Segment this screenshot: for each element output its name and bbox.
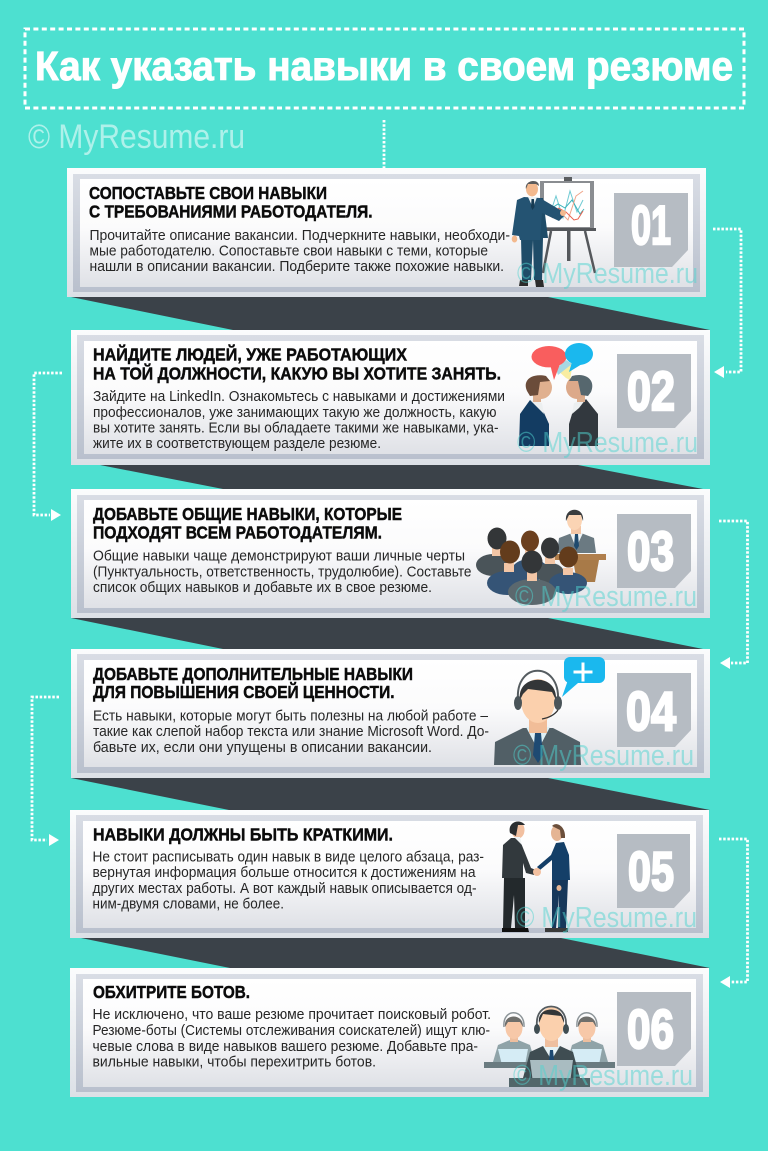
watermark: step 5: © MyResume.ru (516, 902, 697, 934)
title frame and heading (25, 29, 744, 108)
arrow: step 4 to step 5 (32, 697, 59, 846)
body text: step 6: Не исключено, что ваше резюме прочитает поисковый робот. (92, 1007, 491, 1023)
body text: step 3: (Пунктуальность, ответственность, трудолюбие). Составьте (93, 565, 472, 581)
heading: step 1: С ТРЕБОВАНИЯМИ РАБОТОДАТЕЛЯ. (89, 202, 372, 222)
body text: step 5: ним-двумя словами, не более. (92, 897, 284, 913)
panel: step 6 (70, 968, 709, 1097)
body text: step 1: Прочитайте описание вакансии. Подчеркните навыки, необходи- (90, 228, 510, 244)
body text: step 2: вы хотите занять. Если вы обладаете такими же навыками, ука- (93, 421, 499, 437)
body text: step 1: нашли в описании вакансии. Подберите также похожие навыки. (90, 259, 504, 275)
dark ribbon: 1 to 2 (71, 297, 710, 330)
number badge: 03: 03 (627, 520, 674, 582)
watermark: step 3: © MyResume.ru (515, 581, 697, 613)
icon: headset operator with plus bubble (494, 657, 605, 765)
number badge: 05: 05 (628, 840, 674, 902)
icon: presenter at easel (512, 177, 596, 287)
body text: step 6: вильные навыки, чтобы перехитрить ботов. (92, 1055, 376, 1071)
heading: step 5: НАВЫКИ ДОЛЖНЫ БЫТЬ КРАТКИМИ. (93, 825, 393, 845)
body text: step 2: Зайдите на LinkedIn. Ознакомьтесь с навыками и достижениями (93, 389, 505, 405)
number badge: 02: 02 (627, 360, 675, 422)
number badge: 01 (614, 193, 688, 267)
panel: step 3 (71, 489, 710, 618)
heading: step 3 (93, 504, 402, 543)
heading: step 6: ОБХИТРИТЕ БОТОВ. (93, 982, 250, 1002)
panel: step 4 (71, 649, 710, 778)
heading: step 4 (93, 664, 413, 702)
heading: step 2: НАЙДИТЕ ЛЮДЕЙ, УЖЕ РАБОТАЮЩИХ (93, 344, 407, 365)
watermark: step 2: © MyResume.ru (517, 427, 698, 459)
connector: title to step 1 (383, 120, 385, 168)
heading: step 4: ДОБАВЬТЕ ДОПОЛНИТЕЛЬНЫЕ НАВЫКИ (93, 664, 413, 684)
watermark: step 1: © MyResume.ru (517, 258, 698, 290)
panel: step 2 (71, 330, 710, 465)
watermark: step 6: © MyResume.ru (513, 1060, 693, 1092)
body text: step 4: бавьте их, если они упущены в описании вакансии. (93, 740, 432, 756)
number badge: 04 (617, 673, 691, 747)
number badge: 02 (617, 354, 691, 428)
body text: step 2 (93, 389, 505, 452)
body text: step 4: такие как слепой набор текста или знание Microsoft Word. До- (93, 724, 489, 740)
panel: step 1 (67, 168, 706, 297)
title frame and heading: Как указать навыки в своем резюме (35, 43, 733, 89)
arrow: step 5 to step 6 (719, 839, 748, 988)
body text: step 5: Не стоит расписывать один навык в виде целого абзаца, раз- (92, 850, 484, 866)
heading: step 4: ДЛЯ ПОВЫШЕНИЯ СВОЕЙ ЦЕННОСТИ. (93, 681, 394, 702)
body text: step 1: мые работодателю. Сопоставьте свои навыки с теми, которые (90, 244, 488, 260)
body text: step 1 (90, 228, 510, 275)
arrow: step 3 to step 4 (719, 521, 748, 669)
icon: handshake (502, 822, 570, 932)
heading: step 3: ДОБАВЬТЕ ОБЩИЕ НАВЫКИ, КОТОРЫЕ (93, 504, 402, 524)
body text: step 4 (93, 709, 489, 756)
body text: step 3: Общие навыки чаще демонстрируют ваши личные черты (93, 549, 465, 565)
body text: step 6 (92, 1007, 491, 1071)
body text: step 2: профессионалов, уже занимающих такую же должность, какую (93, 405, 497, 421)
body text: step 3: список общих навыков и добавьте их в свое резюме. (93, 580, 432, 596)
body text: step 6: чевые слова в виде навыков вашего резюме. Добавьте пра- (92, 1039, 478, 1055)
body text: step 5: вернутая информация больше относится к достижениям на (92, 865, 476, 881)
number badge: 04: 04 (626, 680, 676, 742)
body text: step 5: других местах работы. А вот каждый навык описывается од- (92, 881, 477, 897)
watermark: top: © MyResume.ru (28, 118, 245, 156)
heading: step 3: ПОДХОДЯТ ВСЕМ РАБОТОДАТЕЛЯМ. (93, 523, 382, 543)
icon: two men talking (519, 343, 598, 446)
body text: step 6: Резюме-боты (Системы отслеживания соискателей) ищут клю- (92, 1023, 490, 1039)
body text: step 4: Есть навыки, которые могут быть полезны на любой работе – (93, 709, 488, 725)
icon: speaker and audience (476, 510, 606, 605)
watermark: step 4: © MyResume.ru (513, 740, 694, 772)
body text: step 2: жите их в соответствующем разделе резюме. (93, 436, 381, 452)
heading: step 1: СОПОСТАВЬТЕ СВОИ НАВЫКИ (89, 183, 327, 203)
number badge: 03 (617, 514, 691, 588)
body text: step 5 (92, 850, 484, 913)
panel: step 5 (70, 810, 709, 938)
heading: step 2: НА ТОЙ ДОЛЖНОСТИ, КАКУЮ ВЫ ХОТИТЕ ЗАНЯТЬ. (93, 362, 501, 383)
heading: step 1 (89, 183, 372, 222)
dark ribbon: 2 to 3 (100, 465, 703, 489)
dark ribbon: 4 to 5 (71, 778, 710, 810)
body text: step 3 (93, 549, 472, 596)
heading: step 2 (93, 344, 501, 383)
number badge: 01: 01 (631, 194, 671, 256)
arrow: step 2 to step 3 (34, 373, 62, 521)
number badge: 06 (617, 992, 691, 1066)
number badge: 06: 06 (627, 998, 674, 1060)
arrow: step 1 to step 2 (713, 229, 741, 378)
icon: three headset operators (484, 1006, 615, 1087)
dark ribbon: 3 to 4 (71, 618, 703, 649)
dark ribbon: 5 to 6 (81, 938, 710, 968)
